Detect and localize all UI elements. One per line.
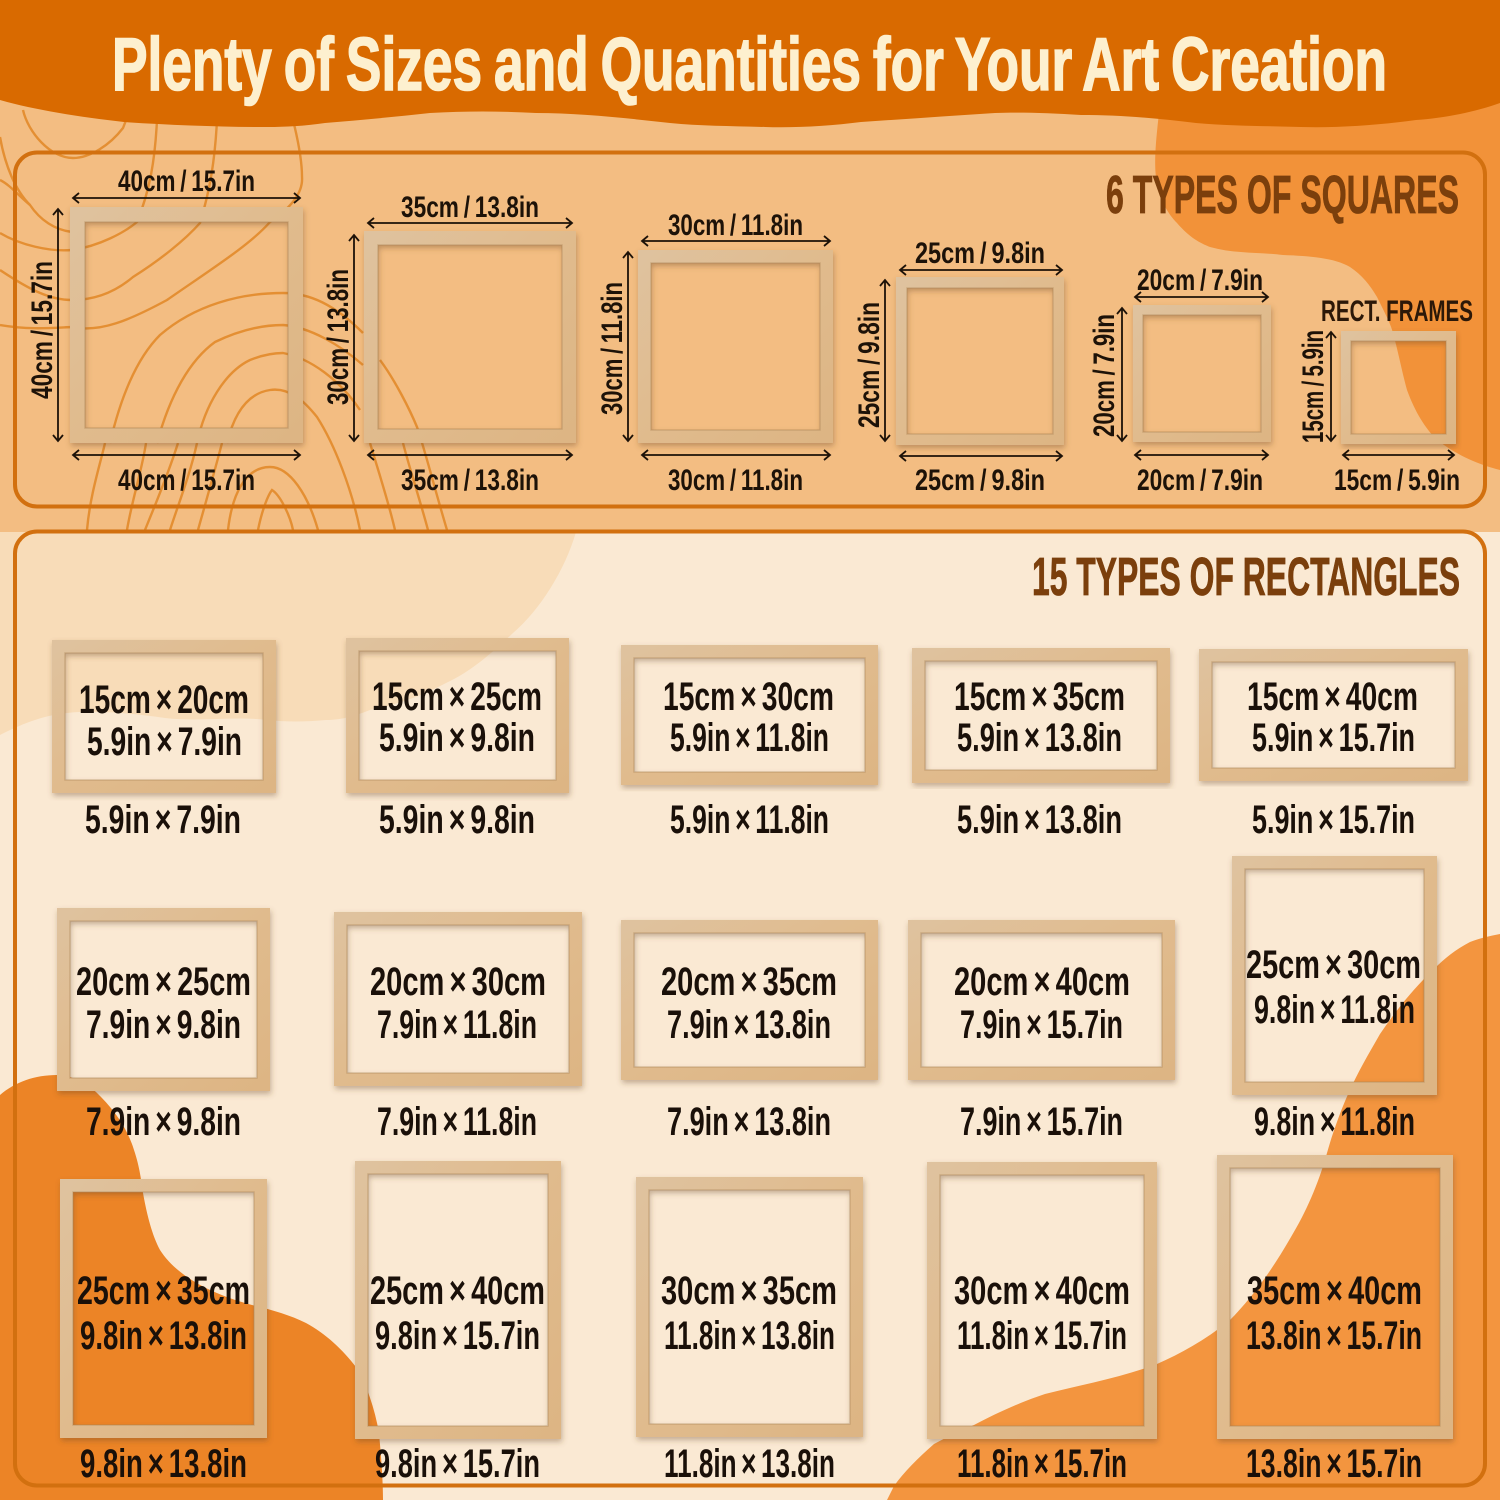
rectangle frame 20 x 30: 20cm × 30cm [370, 960, 546, 1004]
rectangle frame 30 x 40: 30cm × 40cm [954, 1269, 1130, 1313]
rectangle frame 15 x 25: 5.9in × 9.8in [379, 798, 535, 842]
rectangle frame 25 x 35 [66, 1186, 260, 1486]
rectangle frame 15 x 20: 15cm × 20cm [79, 678, 249, 722]
rectangle frame 15 x 35 [918, 654, 1164, 842]
rectangle frame 15 x 40: 5.9in × 15.7in [1252, 798, 1415, 842]
rectangle frame 30 x 35: 30cm × 35cm [661, 1269, 837, 1313]
rectangle frame 20 x 25: 20cm × 25cm [76, 960, 251, 1004]
square frame 20cm [1088, 264, 1268, 497]
rectangle frame 25 x 35: 25cm × 35cm [77, 1269, 250, 1313]
panel: squares [15, 152, 1485, 506]
square frame 20cm: 20cm / 7.9in [1137, 264, 1263, 297]
square frame 25cm: 25cm / 9.8in [915, 464, 1045, 497]
rectangle frame 30 x 35 [642, 1184, 856, 1486]
square frame 30cm: 30cm / 11.8in [668, 209, 803, 242]
rectangle frame 20 x 35: 7.9in × 13.8in [667, 1100, 831, 1144]
rectangle frame 20 x 35 [628, 926, 872, 1144]
rectangle frame 15 x 25: 15cm × 25cm [372, 675, 542, 719]
rectangle frame 20 x 25 [64, 914, 264, 1144]
header band [0, 0, 1500, 127]
background: lower section [0, 532, 1500, 1500]
rectangle frame 25 x 40: 9.8in × 15.7in [375, 1442, 540, 1486]
square frame 35cm [322, 191, 572, 497]
rectangle frame 25 x 30: 9.8in × 11.8in [1254, 988, 1415, 1032]
rectangle frame 20 x 40 [914, 926, 1168, 1144]
rectangle frame 25 x 40: 25cm × 40cm [370, 1269, 545, 1313]
rectangle frame 20 x 30 [340, 918, 576, 1144]
rectangle frame 15 x 25 [352, 644, 562, 842]
rectangle frame 20 x 40: 7.9in × 15.7in [960, 1100, 1123, 1144]
rectangle frame 20 x 40: 20cm × 40cm [954, 960, 1130, 1004]
rectangle frame 35 x 40: 35cm × 40cm [1247, 1269, 1422, 1313]
rectangle frame 20 x 40: 7.9in × 15.7in [960, 1003, 1123, 1047]
rectangle frame 15 x 30 [628, 652, 872, 842]
square frame 35cm: 35cm / 13.8in [401, 191, 539, 224]
rectangle frame 25 x 30: 25cm × 30cm [1246, 943, 1421, 987]
rectangle frame 15 x 35: 15cm × 35cm [954, 675, 1125, 719]
square frame 30cm: 30cm / 11.8in [668, 464, 803, 497]
square frame 25cm: 25cm / 9.8in [915, 237, 1045, 270]
rectangle frame 25 x 40: 9.8in × 15.7in [375, 1314, 540, 1358]
rectangle frame 20 x 25: 7.9in × 9.8in [86, 1100, 241, 1144]
rectangle frame 20 x 35: 20cm × 35cm [661, 960, 837, 1004]
rectangle frame 15 x 20 [58, 646, 270, 842]
rectangle frame 30 x 40: 11.8in × 15.7in [957, 1314, 1127, 1358]
square frame 40cm [26, 165, 300, 497]
square frame 35cm: 35cm / 13.8in [401, 464, 539, 497]
square frame 25cm [853, 237, 1062, 497]
rectangle frame 15 x 30: 5.9in × 11.8in [670, 798, 829, 842]
square frame 40cm: 40cm / 15.7in [26, 261, 59, 399]
rectangle frame 15 x 25: 5.9in × 9.8in [379, 716, 535, 760]
rectangle frame 15 x 40: 15cm × 40cm [1247, 675, 1418, 719]
square frame 25cm: 25cm / 9.8in [853, 302, 886, 428]
rectangle frame 30 x 35: 11.8in × 13.8in [664, 1314, 835, 1358]
decoration: orange blob lower left [0, 1075, 383, 1500]
square frame 15cm [1297, 330, 1460, 497]
square frame 35cm: 30cm / 13.8in [322, 269, 355, 405]
rectangle frame 25 x 35: 9.8in × 13.8in [80, 1314, 247, 1358]
rectangle frame 25 x 35: 9.8in × 13.8in [80, 1442, 247, 1486]
square frame 40cm: 40cm / 15.7in [118, 464, 255, 497]
rectangle frame 15 x 30: 15cm × 30cm [663, 675, 834, 719]
rectangle frame 15 x 40: 5.9in × 15.7in [1252, 716, 1415, 760]
rectangle frame 15 x 30: 5.9in × 11.8in [670, 716, 829, 760]
rectangle frame 30 x 40 [934, 1168, 1150, 1486]
square frame 30cm: 30cm / 11.8in [596, 282, 629, 415]
rectangle frame 20 x 30: 7.9in × 11.8in [377, 1100, 537, 1144]
background: upper section [0, 0, 1500, 532]
rectangle frame 25 x 30 [1238, 862, 1430, 1144]
square frame 20cm: 20cm / 7.9in [1088, 314, 1121, 437]
square frame 40cm: 40cm / 15.7in [118, 165, 255, 198]
rectangle frame 15 x 35: 5.9in × 13.8in [957, 716, 1122, 760]
square frame 15cm: 15cm / 5.9in [1334, 464, 1460, 497]
rectangle frame 35 x 40 [1224, 1162, 1446, 1486]
decoration: wood grain contour lines [0, 110, 447, 530]
rectangle frame 15 x 20: 5.9in × 7.9in [87, 720, 242, 764]
rectangle frame 20 x 30: 7.9in × 11.8in [377, 1003, 537, 1047]
decoration: orange blob upper right [1155, 90, 1500, 470]
rectangle frame 15 x 40 [1206, 656, 1462, 842]
decoration: tan blob upper left of lower panel [0, 532, 576, 735]
rectangle frame 30 x 35: 11.8in × 13.8in [664, 1442, 835, 1486]
square frame 30cm [596, 209, 830, 497]
rectangle frame 15 x 20: 5.9in × 7.9in [85, 798, 241, 842]
rectangle frame 15 x 35: 5.9in × 13.8in [957, 798, 1122, 842]
square frame 20cm: 20cm / 7.9in [1137, 464, 1263, 497]
rectangle frame 25 x 40 [362, 1168, 554, 1486]
rectangle frame 20 x 25: 7.9in × 9.8in [86, 1003, 241, 1047]
square frame 15cm: 15cm / 5.9in [1297, 330, 1330, 443]
rectangle frame 20 x 35: 7.9in × 13.8in [667, 1003, 831, 1047]
panel: rectangles [15, 532, 1485, 1486]
rectangle frame 30 x 40: 11.8in × 15.7in [957, 1442, 1127, 1486]
rectangle frame 25 x 30: 9.8in × 11.8in [1254, 1100, 1415, 1144]
decoration: orange blob lower right [887, 934, 1500, 1500]
